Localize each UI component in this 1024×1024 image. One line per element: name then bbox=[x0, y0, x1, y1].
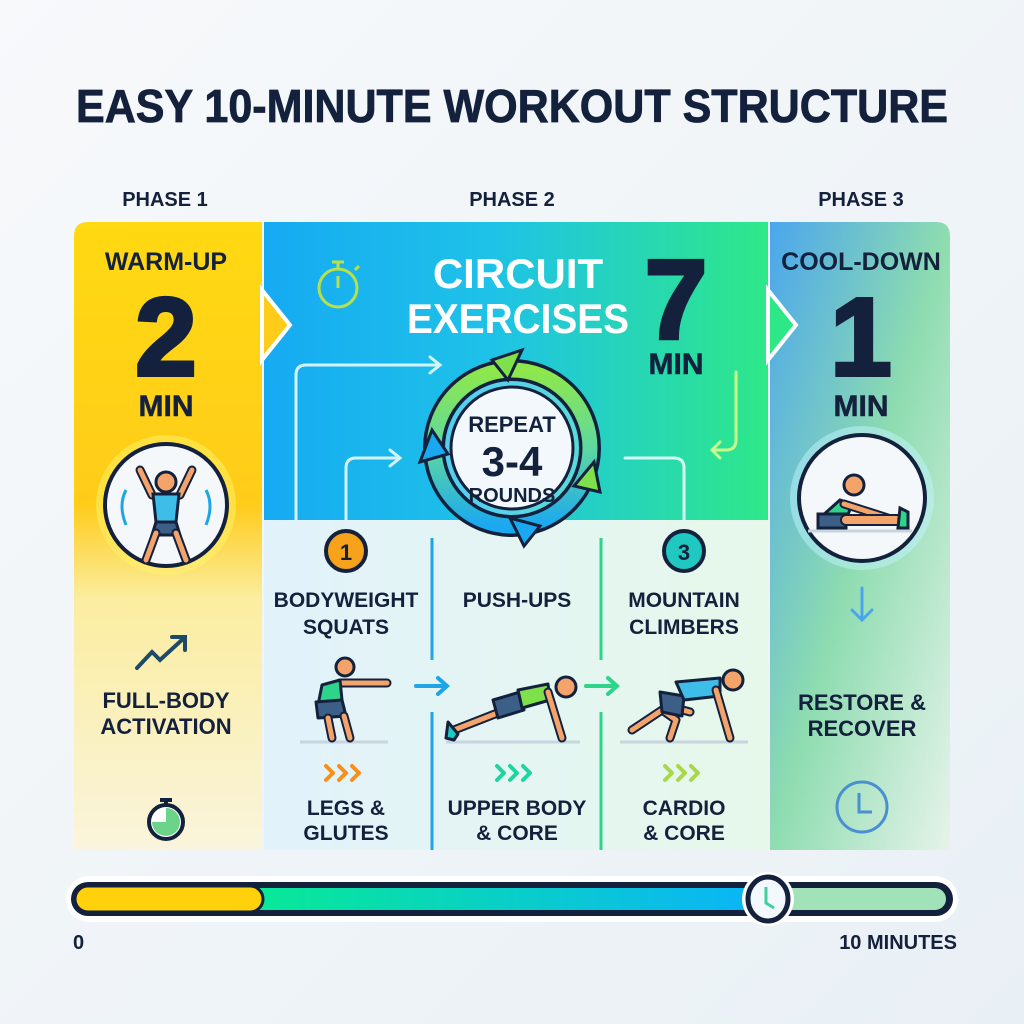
badge 3: 3 bbox=[678, 540, 690, 565]
chevrons bbox=[326, 766, 698, 780]
timeline labels bbox=[73, 932, 957, 954]
warm-up duration: MIN bbox=[138, 390, 194, 423]
panel: warm-up bbox=[74, 222, 262, 850]
icon: jumping jack bbox=[96, 435, 236, 575]
target areas: LEGS & bbox=[307, 797, 385, 820]
exercise names: BODYWEIGHT bbox=[274, 589, 418, 612]
warm-up duration: 2 bbox=[135, 276, 197, 399]
icon: stretch figure bbox=[790, 426, 934, 570]
cycle: repeat rounds: ROUNDS bbox=[469, 485, 555, 507]
icon: down arrow bbox=[852, 588, 872, 620]
icon: stopwatch outline bbox=[319, 262, 359, 307]
timeline labels: 0 bbox=[73, 932, 84, 954]
arrow to push-ups bbox=[416, 678, 447, 694]
warm-up description: FULL-BODY bbox=[102, 688, 230, 713]
icon: push-up figure bbox=[446, 677, 580, 742]
phase labels: PHASE 2 bbox=[469, 189, 555, 211]
timeline labels: 10 MINUTES bbox=[839, 932, 957, 954]
circuit duration: 7 bbox=[645, 237, 707, 362]
exercise names: MOUNTAIN bbox=[628, 589, 740, 612]
loop arrows bbox=[296, 357, 736, 530]
warm-up description: ACTIVATION bbox=[100, 714, 232, 739]
target areas: & CORE bbox=[476, 822, 558, 845]
cool-down description bbox=[798, 690, 926, 741]
circuit heading: CIRCUIT bbox=[433, 250, 603, 297]
phase labels: PHASE 1 bbox=[122, 189, 208, 211]
title: EASY 10-MINUTE WORKOUT STRUCTURE bbox=[76, 80, 948, 132]
target areas bbox=[303, 797, 725, 845]
badge 3 bbox=[664, 531, 704, 571]
target areas: GLUTES bbox=[303, 822, 389, 845]
exercise names: PUSH-UPS bbox=[463, 589, 571, 612]
target areas: UPPER BODY bbox=[448, 797, 586, 820]
panel: cool-down bbox=[768, 222, 950, 850]
cool-down description: RESTORE & bbox=[798, 690, 926, 715]
phase labels bbox=[122, 189, 904, 211]
arrow chevron from warm-up bbox=[262, 290, 290, 360]
exercise names: CLIMBERS bbox=[629, 616, 739, 639]
icon: stopwatch bbox=[149, 800, 183, 839]
icon: clock bbox=[837, 782, 887, 832]
exercise names bbox=[274, 589, 740, 639]
exercise names: SQUATS bbox=[303, 616, 389, 639]
circuit heading bbox=[407, 250, 629, 342]
icon: squat figure bbox=[300, 658, 388, 742]
icon: mountain climber figure bbox=[620, 670, 748, 742]
panel: circuit top bbox=[262, 222, 768, 530]
icon: trend arrow bbox=[137, 637, 185, 668]
cycle: repeat rounds: 3-4 bbox=[482, 438, 543, 485]
cycle: repeat rounds: REPEAT bbox=[468, 412, 556, 437]
timeline marker clock bbox=[742, 872, 794, 926]
circuit duration: MIN bbox=[648, 348, 704, 381]
circuit heading: EXERCISES bbox=[407, 295, 629, 342]
arrow chevron from circuit bbox=[768, 290, 796, 360]
panel: circuit exercises bbox=[264, 520, 768, 850]
warm-up heading: WARM-UP bbox=[105, 248, 227, 276]
target areas: & CORE bbox=[643, 822, 725, 845]
phase labels: PHASE 3 bbox=[818, 189, 904, 211]
badge 1 bbox=[326, 531, 366, 571]
warm-up description bbox=[100, 688, 232, 739]
cool-down duration: MIN bbox=[834, 390, 888, 423]
cool-down heading: COOL-DOWN bbox=[781, 248, 941, 276]
cycle: repeat rounds bbox=[420, 350, 600, 546]
target areas: CARDIO bbox=[643, 797, 725, 820]
arrow to mountain climbers bbox=[586, 678, 617, 694]
timeline bar bbox=[66, 872, 958, 926]
badge 1: 1 bbox=[340, 540, 352, 565]
cool-down duration: 1 bbox=[830, 276, 892, 399]
cool-down description: RECOVER bbox=[808, 716, 917, 741]
